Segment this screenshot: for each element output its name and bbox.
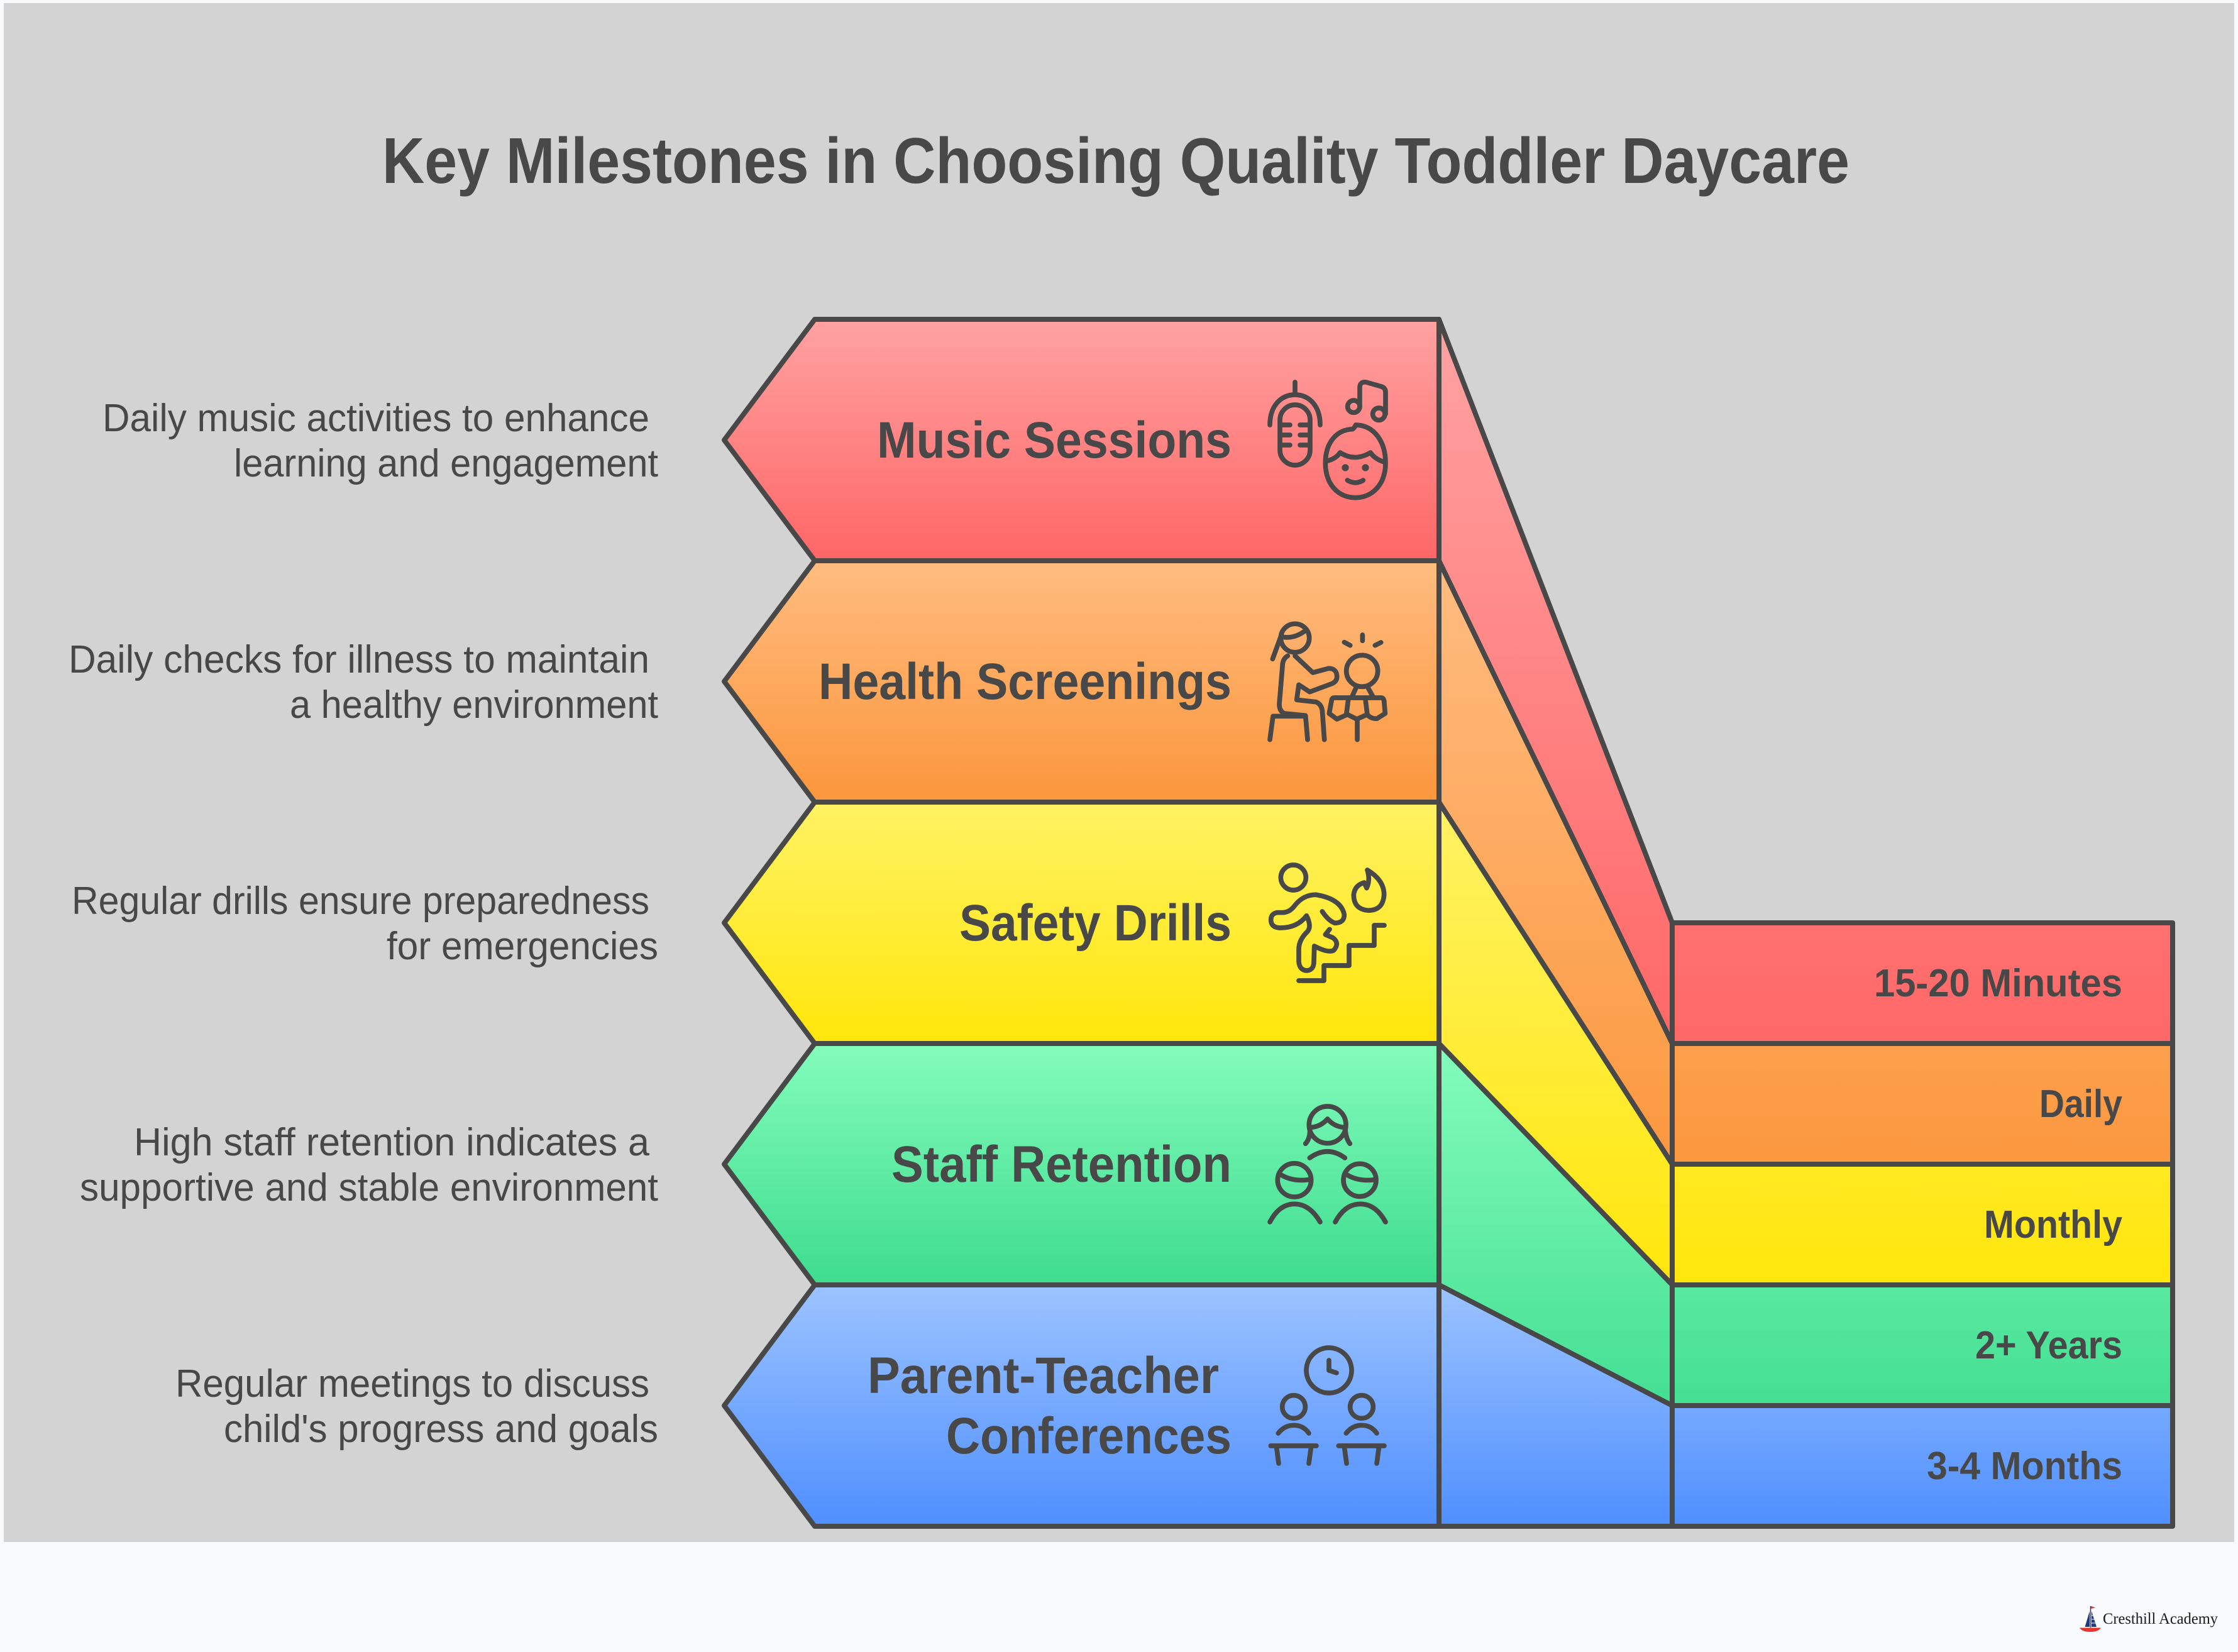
description: safety drills: Regular drills ensure preparedness (72, 879, 649, 923)
label: Staff Retention: Staff Retention (891, 1136, 1232, 1193)
label: Parent-Teacher Conferences: Parent-Teacher (868, 1347, 1219, 1404)
icon: microphone, music note and child (1270, 382, 1386, 498)
side connector and duration bar: 2+ Years (1439, 1044, 2173, 1406)
side connector and duration bar: Monthly (1439, 802, 2173, 1285)
icon: person escaping a fire on stairs (1271, 865, 1384, 981)
label: Safety Drills: Safety Drills (959, 895, 1232, 952)
label: Parent-Teacher Conferences: Conferences (946, 1407, 1232, 1465)
icon: three staff members (1270, 1106, 1386, 1222)
description: health screenings (69, 638, 658, 727)
description: music sessions: Daily music activities to enhance (102, 397, 649, 440)
side connector and duration bar: Daily (1439, 561, 2173, 1164)
title: Key Milestones in Choosing Quality Toddler Daycare (382, 124, 1849, 197)
description: parent-teacher conferences: Regular meetings to discuss (175, 1362, 649, 1406)
label: Parent-Teacher Conferences (868, 1347, 1232, 1465)
logo: Cresthill Academy: Cresthill Academy (2103, 1611, 2218, 1627)
arrow panel: Health Screenings (724, 561, 1439, 802)
arrow panel: Parent-Teacher Conferences (724, 1285, 1439, 1526)
description: staff retention (80, 1121, 658, 1209)
description: safety drills (72, 879, 658, 968)
description: music sessions: learning and engagement (234, 442, 658, 485)
description: parent-teacher conferences: child's progress and goals (224, 1407, 658, 1451)
duration: 3-4 Months: 3-4 Months (1927, 1445, 2122, 1488)
duration: Daily: Daily (2039, 1082, 2122, 1126)
arrow panel: Music Sessions (724, 319, 1439, 561)
description: health screenings: Daily checks for illness to maintain (69, 638, 649, 681)
logo: Cresthill Academy (2080, 1606, 2218, 1632)
description: staff retention: High staff retention indicates a (134, 1121, 650, 1164)
label: Health Screenings: Health Screenings (819, 653, 1232, 710)
description: staff retention: supportive and stable environment (80, 1166, 658, 1209)
duration: 2+ Years: 2+ Years (1975, 1324, 2122, 1367)
description: parent-teacher conferences (175, 1362, 658, 1451)
description: health screenings: a healthy environment (290, 683, 658, 727)
description: safety drills: for emergencies (387, 925, 658, 968)
duration: 15-20 Minutes: 15-20 Minutes (1874, 962, 2122, 1005)
description: music sessions (102, 397, 658, 485)
side connector and duration bar: 15-20 Minutes (1439, 319, 2173, 1044)
arrow panel: Safety Drills (724, 802, 1439, 1044)
label: Music Sessions: Music Sessions (877, 412, 1232, 469)
duration: Monthly: Monthly (1984, 1203, 2122, 1247)
icon: parent and teacher at desks with clock (1271, 1348, 1384, 1463)
side connector and duration bar: 3-4 Months (1439, 1285, 2173, 1526)
icon: caregiver checking a child (1270, 624, 1385, 740)
arrow panel: Staff Retention (724, 1044, 1439, 1285)
